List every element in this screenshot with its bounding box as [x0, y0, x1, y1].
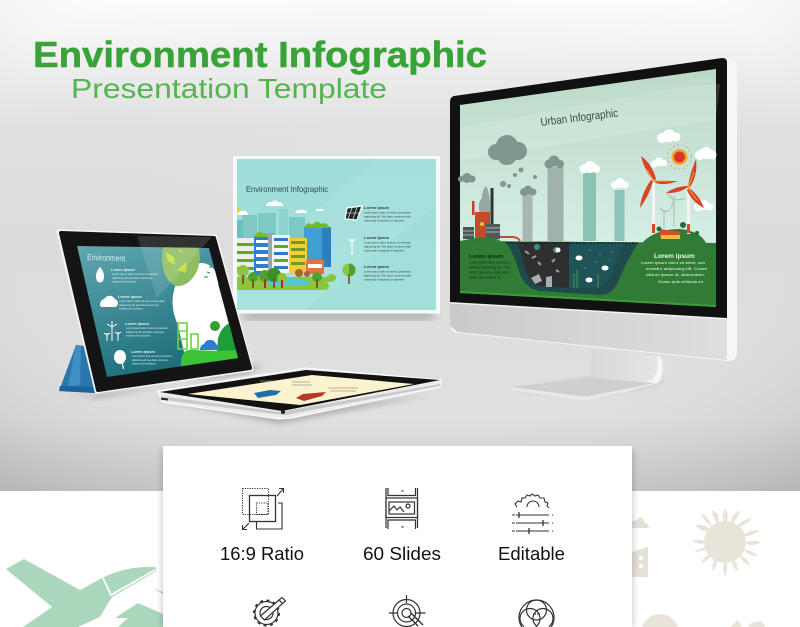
sun [668, 145, 692, 169]
label: 16:9 ratio: 16:9 Ratio [220, 543, 304, 564]
text: lorem ipsum one: euismod tincidunt ut laoreet [364, 218, 404, 222]
green ground band [460, 241, 716, 307]
text: lorem ipsum three: adipiscing elit. Sed diam nonummy nibh [364, 274, 411, 278]
tablet text one: Lorem ipsum dolor sit amet consectetur [112, 272, 158, 276]
flat tablet [150, 368, 441, 424]
tablet text one [111, 268, 158, 284]
water pit [506, 242, 638, 295]
monitor left text: sectetur adipiscing elit. Cras [469, 266, 510, 270]
hills [460, 229, 706, 243]
tablet white blob and greens [162, 247, 238, 366]
debris [531, 274, 552, 287]
left tablet [59, 232, 262, 398]
grey studio background [0, 0, 800, 491]
tablet heading: Environment [87, 252, 126, 263]
small house [656, 222, 699, 239]
grey clouds [458, 135, 564, 196]
monitor right text: dictum ipsum id, dictumdam. [646, 272, 705, 277]
tablet text two: adipiscing elit sed diam nonummy [119, 303, 159, 307]
tablet text three: euismod tincidunt [126, 334, 150, 338]
monitor screen heading: Urban Infographic [540, 108, 619, 129]
factory [463, 186, 520, 241]
turbines background [660, 194, 685, 228]
white clouds [580, 130, 716, 211]
tablet text two: euismod tincidunt [119, 306, 143, 310]
smoke pillars [522, 167, 624, 241]
city illustration [237, 200, 336, 290]
label: editable: Editable [498, 543, 565, 564]
tablet text one: Lorem Ipsum [111, 268, 135, 272]
icon: tree [342, 264, 356, 284]
monitor left text [469, 254, 512, 280]
tablet text two: Lorem ipsum dolor sit amet consectetur [119, 299, 165, 303]
monitor right text: Lorem ipsum [654, 253, 695, 260]
tablet text one: adipiscing elit sed diam nonummy [112, 276, 152, 280]
monitor body [450, 58, 737, 361]
text: lorem ipsum two: Lorem ipsum dolor sit amet, consectetur [364, 240, 411, 244]
turbine poles and blades [640, 156, 704, 234]
text: lorem ipsum three: Lorem ipsum dolor sit amet, consectetur [364, 270, 411, 274]
icon: venn circles [519, 600, 554, 627]
fish [576, 256, 608, 282]
text: lorem ipsum three: euismod tincidunt ut laoreet [364, 278, 404, 282]
text: lorem ipsum three [364, 264, 411, 282]
monitor right text [641, 253, 708, 284]
icon: gear with pencil [254, 598, 286, 626]
monitor [450, 58, 737, 400]
tablet text four: Lorem Ipsum [131, 350, 155, 354]
tablet text three [125, 322, 168, 338]
subtitle: Presentation Template [71, 73, 387, 104]
tablet icon: car [100, 296, 118, 307]
tablet text four: Lorem ipsum dolor sit amet consectetur [132, 354, 172, 358]
text: lorem ipsum one: Lorem Ipsum [364, 205, 390, 210]
decoration: bottom circle and hills [642, 614, 766, 627]
monitor right text: sectetur adipiscing elit. Conse [646, 266, 708, 271]
title: Environment Infographic [33, 34, 487, 75]
features card [161, 446, 634, 627]
tablet icon: wind turbines [104, 321, 121, 341]
tablet glass reflection [137, 236, 212, 298]
text: lorem ipsum three: Lorem Ipsum [364, 264, 390, 269]
label: 60 slides: 60 Slides [363, 543, 441, 564]
tablet text four: euismod tincidunt [132, 362, 156, 366]
text: lorem ipsum two [364, 235, 411, 252]
text: lorem ipsum two: adipiscing elit. Sed diam nonummy nibh [364, 244, 411, 248]
decoration: cloud and house [632, 517, 649, 577]
monitor right text: Donec quis vehicula mi. [658, 279, 704, 284]
tablet text three: adipiscing elit sed diam nonummy [126, 330, 164, 334]
tablet icon: leaf [96, 267, 104, 282]
tablet icon: tree [114, 350, 126, 369]
text: lorem ipsum one [364, 205, 411, 222]
monitor right text: Lorem ipsum dolor sit amet, con [641, 260, 705, 265]
decoration: sun [692, 508, 761, 576]
decoration: plane silhouette [6, 559, 163, 627]
text: lorem ipsum one: adipiscing elit. Sed diam nonummy nibh [364, 214, 411, 218]
monitor left text: dictum ipsum id, dictumdas [469, 270, 509, 274]
text: lorem ipsum two: Lorem Ipsum [364, 235, 390, 240]
icon: editable [512, 494, 553, 534]
icon: wind turbine [348, 238, 356, 255]
tablet text two [118, 295, 165, 310]
tablet text two: Lorem Ipsum [118, 295, 142, 299]
monitor left text: Donec quis vehicula mi. [469, 276, 501, 280]
icon: 16:9 ratio [242, 488, 284, 530]
white lower band [0, 491, 800, 627]
tablet text one: euismod tincidunt [112, 280, 136, 284]
icon: target [389, 595, 426, 626]
text: lorem ipsum two: euismod tincidunt ut laoreet [364, 248, 404, 252]
flat tablet screen [188, 375, 414, 405]
slide heading: Environment Infographic [246, 184, 328, 194]
tablet text four [131, 350, 172, 366]
tablet text four: adipiscing elit sed diam nonummy [132, 358, 168, 362]
tablet text three: Lorem ipsum dolor sit amet consectetur [126, 326, 168, 330]
icon: 60 slides [386, 488, 418, 529]
text: lorem ipsum one: Lorem ipsum dolor sit amet, consectetur [364, 210, 411, 214]
monitor stand [511, 349, 664, 400]
monitor screen sky [460, 69, 716, 243]
centre slide: environment infographic [233, 156, 440, 320]
tablet stand [59, 345, 95, 393]
monitor left text: Lorem ipsum dolor sit amet, a [469, 260, 512, 264]
tablet text three: Lorem Ipsum [125, 322, 149, 326]
icon: solar panel [345, 206, 362, 220]
monitor left text: Lorem ipsum [469, 254, 504, 260]
